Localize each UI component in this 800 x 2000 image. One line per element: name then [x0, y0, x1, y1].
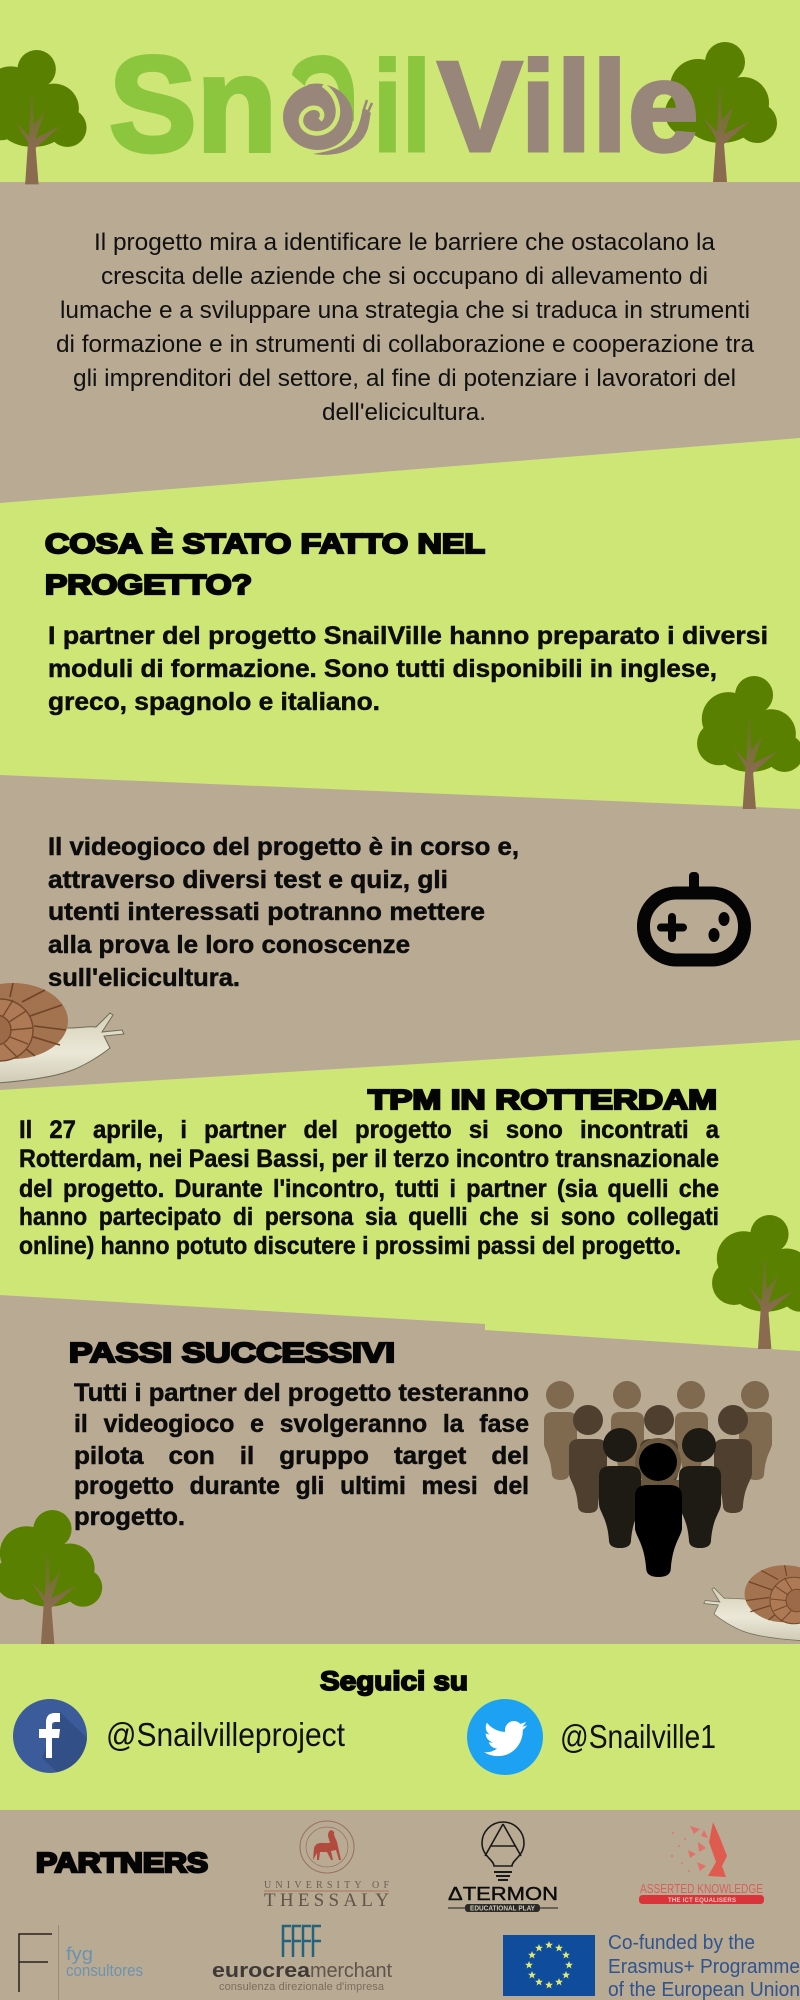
text block: intro: gli imprenditori del settore, al fine di potenziare i lavoratori del [73, 365, 736, 392]
text block: intro: Il progetto mira a identificare le barriere che ostacolano la [94, 229, 716, 256]
text block: next steps [74, 1379, 529, 1531]
text: twitter handle: @Snailville1 [560, 1718, 716, 1755]
text block: Rotterdam meeting: Il 27 aprile, i partner del progetto si sono incontrati a [19, 1116, 720, 1144]
text block: Rotterdam meeting: del progetto. Durante l'incontro, tutti i partner (sia quelli che [19, 1175, 719, 1203]
heading: partners: PARTNERS [36, 1847, 208, 1878]
text block: Rotterdam meeting: hanno partecipato di persona sia quelli che si sono collegati [19, 1203, 719, 1231]
logo: SnailVille: Ville [437, 35, 699, 179]
logo: Asserted Knowledge [639, 1822, 764, 1904]
text block: training modules: greco, spagnolo e italiano. [48, 688, 380, 716]
text block: next steps: progetto. [74, 1503, 185, 1531]
text block: next steps: progetto durante gli ultimi mesi del [74, 1472, 529, 1500]
heading: passi successivi: PASSI SUCCESSIVI [69, 1337, 395, 1368]
icon: header left tree [0, 50, 87, 184]
logo: Asserted Knowledge: THE ICT EQUALISERS [668, 1898, 736, 1904]
logo: eurocreamerchant: merchant [310, 1960, 392, 1982]
text block: videogame: utenti interessati potranno mettere [48, 898, 485, 926]
text block: videogame: sull'elicicultura. [48, 964, 240, 992]
icon: right tree [697, 676, 800, 809]
icon: facebook [13, 1699, 87, 1773]
icon: twitter [467, 1699, 543, 1775]
icon: left snail [0, 983, 124, 1084]
heading: cosa è stato fatto [45, 528, 485, 600]
text block: Rotterdam meeting: online) hanno potuto discutere i prossimi passi del progetto. [19, 1232, 681, 1260]
heading: cosa è stato fatto: COSA È STATO FATTO NEL [45, 528, 485, 559]
text block: next steps: pilota con il gruppo target del [74, 1442, 529, 1470]
text block: Rotterdam meeting: Rotterdam, nei Paesi Bassi, per il terzo incontro transnazionale [19, 1145, 719, 1173]
logo: Asserted Knowledge: ASSERTED KNOWLEDGE [640, 1881, 763, 1896]
icon: game controller [644, 872, 744, 960]
text block: intro: di formazione e in strumenti di collaborazione e cooperazione tra [56, 331, 755, 358]
logo: eurocreamerchant [212, 1926, 392, 1993]
text block: intro: crescita delle aziende che si occupano di allevamento di [101, 263, 708, 290]
logo: SnailVille: il [373, 35, 431, 179]
icon: header right tree [665, 42, 777, 182]
logo: SnailVille [109, 28, 699, 180]
text block: videogame: attraverso diversi test e quiz, gli [48, 866, 448, 894]
text: Erasmus+ co-funding: Co-funded by the [608, 1932, 755, 1954]
logo: fyg consultores: fyg [66, 1944, 93, 1964]
panel: intro tan band [0, 182, 800, 503]
heading: seguici su: Seguici su [320, 1666, 468, 1696]
logo: University of Thessaly: THESSALY [264, 1890, 389, 1911]
text block: videogame [48, 833, 519, 992]
heading: TPM in Rotterdam: TPM IN ROTTERDAM [368, 1084, 717, 1115]
panel: partners tan band [0, 1810, 800, 2000]
text block: next steps: Tutti i partner del progetto testeranno [74, 1379, 529, 1407]
text block: videogame: Il videogioco del progetto è in corso e, [48, 833, 519, 861]
text block: intro [56, 229, 755, 426]
icon: right snail [704, 1565, 800, 1641]
text block: videogame: alla prova le loro conoscenze [48, 931, 410, 959]
text block: intro: lumache e a sviluppare una strategia che si traduca in strumenti [60, 297, 750, 324]
text block: training modules: I partner del progetto SnailVille hanno preparato i diversi [48, 622, 768, 650]
logo: Atermon: ΔTERMON [448, 1884, 558, 1904]
panel: videogame tan band [0, 775, 800, 1090]
text block: Rotterdam meeting [19, 1116, 720, 1260]
logo: fyg consultores: consultores [66, 1961, 143, 1980]
logo: University of Thessaly [264, 1821, 389, 1911]
logo: Atermon [448, 1822, 558, 1912]
logo: Atermon: EDUCATIONAL PLAY [470, 1906, 535, 1912]
text: Erasmus+ co-funding [608, 1932, 800, 2000]
text: facebook handle: @Snailvilleproject [106, 1716, 345, 1753]
logo: University of Thessaly: UNIVERSITY OF [264, 1880, 389, 1891]
logo: eurocreamerchant: consulenza direzionale d'impresa [219, 1981, 385, 1993]
text block: next steps: il videogioco e svolgeranno la fase [74, 1410, 529, 1438]
text block: training modules: moduli di formazione. Sono tutti disponibili in inglese, [48, 655, 717, 683]
logo: EU flag [503, 1935, 595, 1996]
logo: SnailVille: Sn [109, 28, 277, 180]
icon: bottom left tree [0, 1510, 102, 1644]
panel: next steps tan band [0, 1295, 800, 1644]
text block: intro: dell'elicicultura. [322, 399, 486, 426]
heading: cosa è stato fatto: PROGETTO? [45, 569, 252, 600]
icon: tree beside Rotterdam text [712, 1215, 800, 1349]
icon: group of people [544, 1381, 772, 1577]
logo: eurocreamerchant: eurocrea [212, 1960, 311, 1982]
logo: fyg consultores [19, 1925, 143, 2000]
text block: training modules [48, 622, 768, 716]
